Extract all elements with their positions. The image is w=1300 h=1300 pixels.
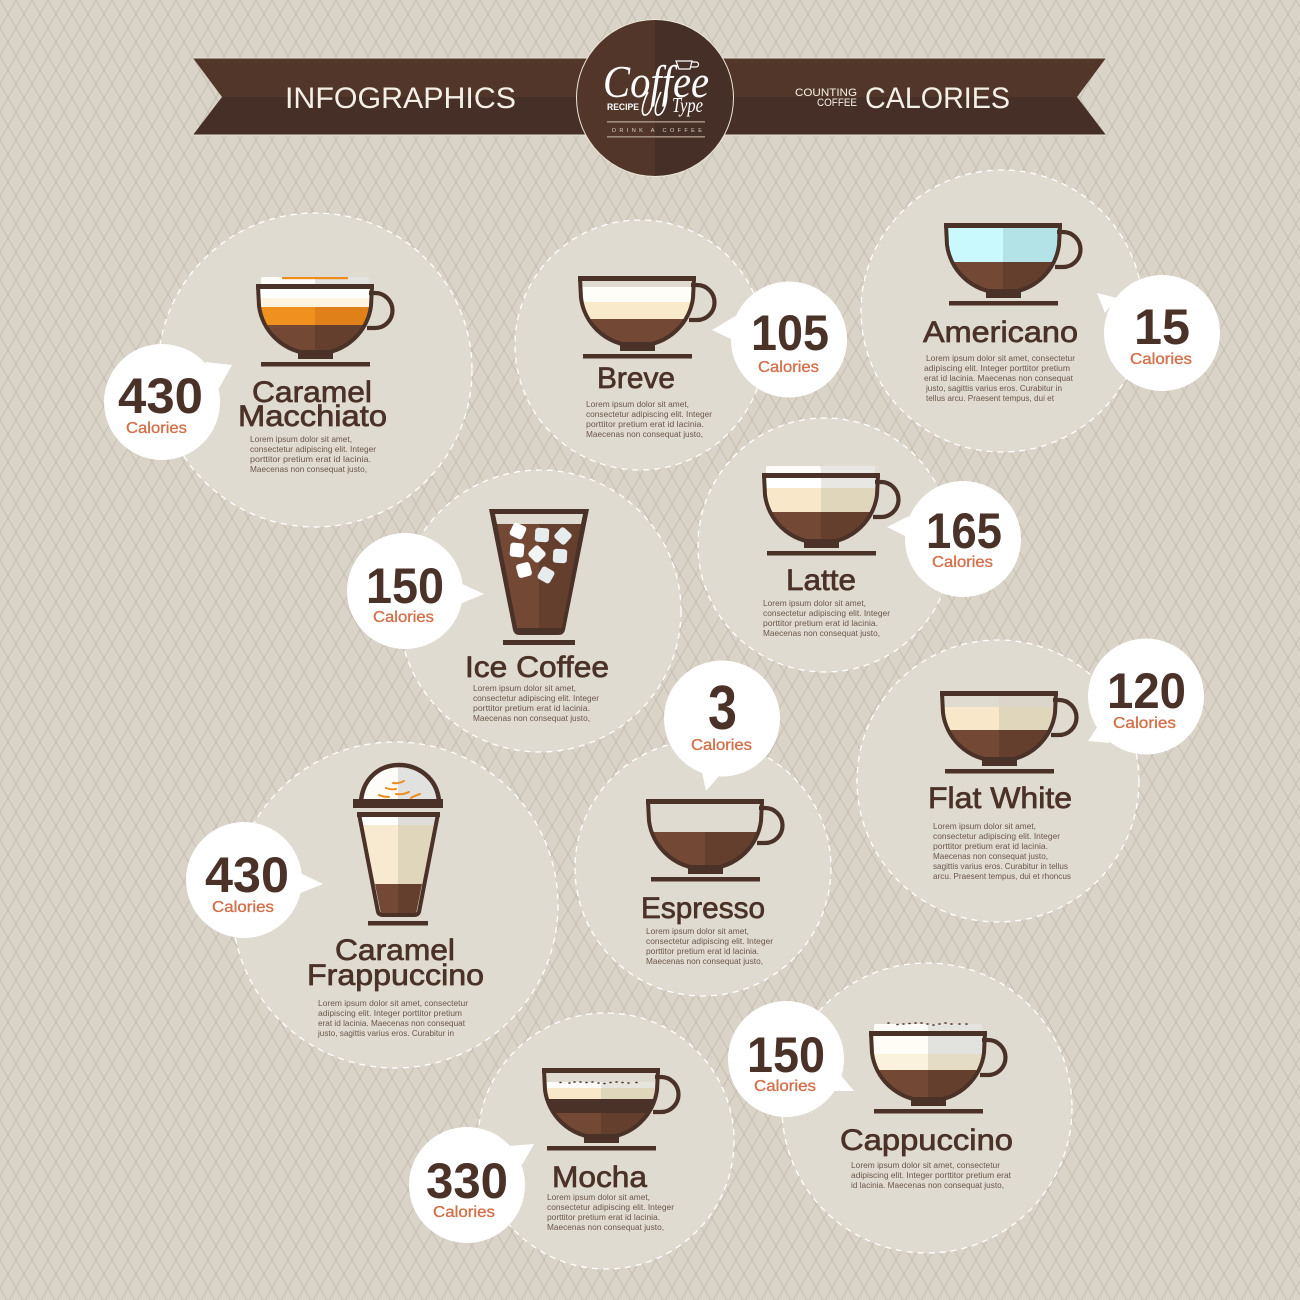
- callout: 330 calories: [409, 1127, 534, 1243]
- description: cappuccino: Lorem ipsum dolor sit amet, consectetur: [851, 1160, 1000, 1170]
- title: cappuccino: Cappuccino: [840, 1124, 1013, 1157]
- foam dots: [560, 1082, 637, 1084]
- title: latte: Latte: [786, 564, 856, 597]
- caramel sprinkles: [379, 781, 420, 798]
- callout: 3 calories: [664, 660, 780, 791]
- title: americano: Americano: [923, 316, 1078, 349]
- description: ice coffee: [473, 683, 599, 723]
- panel: mocha: [409, 1013, 734, 1269]
- panel: breve: [515, 220, 847, 470]
- description: caramel frappuccino: justo, sagittis varius eros. Curabitur in: [317, 1028, 454, 1038]
- description: caramel macchiato: [250, 434, 376, 474]
- description: caramel frappuccino: erat id lacinia. Maecenas non consequat: [318, 1018, 466, 1028]
- description: flat white: arcu. Praesent tempus, dui et rhoncus: [933, 871, 1071, 881]
- description: americano: Lorem ipsum dolor sit amet, consectetur: [926, 353, 1075, 363]
- title: espresso: Espresso: [641, 892, 765, 925]
- description: breve: porttitor pretium erat id lacinia.: [586, 419, 704, 429]
- title: caramel macchiato: Macchiato: [238, 400, 387, 433]
- title: caramel macchiato: [238, 376, 387, 433]
- title: ice coffee: Ice Coffee: [465, 651, 609, 684]
- description: caramel frappuccino: Lorem ipsum dolor sit amet, consectetur: [318, 998, 468, 1008]
- description: caramel macchiato: porttitor pretium erat id lacinia.: [250, 454, 371, 464]
- icon: iced coffee glass: [489, 509, 589, 645]
- title: breve: Breve: [597, 362, 675, 395]
- callout: 330 calories: Calories: [433, 1204, 495, 1221]
- description: flat white: sagittis varius eros. Curabitur in tellus: [933, 861, 1068, 871]
- logo: cup icon: [676, 61, 698, 69]
- description: latte: porttitor pretium erat id lacinia.: [763, 618, 878, 628]
- description: caramel macchiato: Maecenas non consequat justo,: [250, 464, 367, 474]
- callout: 430 calories: 430: [118, 368, 203, 424]
- panel: cappuccino: [728, 963, 1072, 1253]
- icon: breve cup: [578, 276, 714, 358]
- callout: 120 calories: 120: [1107, 663, 1186, 719]
- title: flat white: Flat White: [928, 782, 1072, 815]
- description: latte: consectetur adipiscing elit. Integer: [763, 608, 890, 618]
- description: latte: [763, 598, 890, 638]
- callout: 150 calories: 150: [747, 1027, 825, 1083]
- description: americano: erat id lacinia. Maecenas non consequat: [924, 373, 1074, 383]
- description: ice coffee: Lorem ipsum dolor sit amet,: [473, 683, 576, 693]
- panel: flat white: [857, 638, 1204, 922]
- description: espresso: [646, 926, 773, 966]
- callout: 105 calories: 105: [751, 305, 829, 361]
- description: flat white: consectetur adipiscing elit. Integer: [933, 831, 1060, 841]
- logo badge: [576, 19, 734, 177]
- description: ice coffee: Maecenas non consequat justo,: [473, 713, 590, 723]
- callout: 430 calories: [104, 344, 232, 460]
- foam dots: [888, 1023, 967, 1025]
- description: breve: [586, 399, 712, 439]
- description: breve: Maecenas non consequat justo,: [586, 429, 703, 439]
- description: caramel frappuccino: adipiscing elit. Integer porttitor pretium: [318, 1008, 462, 1018]
- logo: f descenders: [642, 92, 667, 115]
- callout: 15 calories: Calories: [1130, 351, 1192, 368]
- description: mocha: [547, 1192, 674, 1232]
- description: breve: Lorem ipsum dolor sit amet,: [586, 399, 689, 409]
- callout: 430 calories: Calories: [212, 899, 274, 916]
- description: caramel macchiato: consectetur adipiscing elit. Integer: [250, 444, 376, 454]
- description: mocha: Maecenas non consequat justo,: [547, 1222, 664, 1232]
- heading: counting coffee: COFFEE: [817, 97, 857, 109]
- callout: 120 calories: [1088, 638, 1204, 754]
- icon: latte cup: [762, 466, 898, 556]
- description: mocha: porttitor pretium erat id lacinia.: [547, 1212, 660, 1222]
- logo: type: Type: [672, 93, 703, 117]
- callout: 430 calories: [186, 822, 323, 938]
- heading: infographics: INFOGRAPHICS: [285, 82, 516, 115]
- ice cubes: [509, 522, 573, 585]
- callout: 165 calories: Calories: [932, 554, 993, 571]
- callout: 165 calories: [887, 481, 1021, 597]
- description: espresso: porttitor pretium erat id lacinia.: [646, 946, 759, 956]
- heading: calories: CALORIES: [865, 82, 1010, 115]
- panel: latte: [698, 418, 1021, 672]
- logo: tagline: DRINK A COFFEE: [612, 128, 702, 134]
- icon: caramel macchiato cup: [256, 277, 392, 366]
- description: ice coffee: porttitor pretium erat id lacinia.: [473, 703, 590, 713]
- description: mocha: consectetur adipiscing elit. Integer: [547, 1202, 674, 1212]
- description: espresso: Lorem ipsum dolor sit amet,: [646, 926, 749, 936]
- description: cappuccino: adipiscing elit. Integer porttitor pretium erat: [851, 1170, 1012, 1180]
- icon: americano cup: [944, 223, 1080, 306]
- callout: 15 calories: [1097, 275, 1220, 391]
- icon: frappuccino cup: [353, 765, 443, 926]
- description: americano: adipiscing elit. Integer porttitor pretium: [924, 363, 1070, 373]
- description: americano: justo, sagittis varius eros. Curabitur in: [925, 383, 1062, 393]
- description: latte: Maecenas non consequat justo,: [763, 628, 880, 638]
- callout: 105 calories: Calories: [758, 359, 819, 376]
- callout: 105 calories: [712, 282, 847, 398]
- description: ice coffee: consectetur adipiscing elit. Integer: [473, 693, 599, 703]
- title: caramel frappuccino: [307, 934, 484, 992]
- callout: 150 calories: Calories: [754, 1078, 816, 1095]
- icon: flat white cup: [940, 691, 1076, 774]
- ribbon: right: [710, 58, 1106, 135]
- panel: ice coffee: [347, 470, 681, 752]
- description: americano: tellus arcu. Praesent tempus, dui et: [926, 393, 1055, 403]
- description: flat white: [933, 821, 1071, 881]
- logo: recipe: RECIPE: [607, 102, 639, 112]
- panel: caramel frappuccino: [186, 742, 558, 1068]
- callout: 150 calories: [728, 1001, 854, 1117]
- title: caramel macchiato: Caramel: [252, 376, 372, 409]
- callout: 330 calories: 330: [426, 1153, 508, 1209]
- description: breve: consectetur adipiscing elit. Integer: [586, 409, 712, 419]
- icon: cappuccino cup: [869, 1023, 1006, 1114]
- callout: 3 calories: 3: [708, 674, 737, 743]
- icon: mocha cup: [542, 1068, 678, 1150]
- ribbon: left: [193, 58, 600, 135]
- description: espresso: consectetur adipiscing elit. Integer: [646, 936, 773, 946]
- callout: 165 calories: 165: [926, 503, 1002, 559]
- title: mocha: Mocha: [552, 1161, 648, 1194]
- callout: 430 calories: Calories: [126, 420, 187, 437]
- heading: counting coffee: [795, 87, 857, 109]
- logo: tagline: [607, 121, 705, 138]
- icon: espresso cup: [646, 799, 782, 882]
- description: flat white: Lorem ipsum dolor sit amet,: [933, 821, 1036, 831]
- callout: 3 calories: Calories: [691, 737, 752, 754]
- callout: 120 calories: Calories: [1113, 715, 1176, 732]
- description: cappuccino: [851, 1160, 1012, 1190]
- title: caramel frappuccino: Caramel: [335, 934, 455, 967]
- panel: caramel macchiato: [104, 213, 472, 527]
- callout: 150 calories: 150: [366, 558, 444, 614]
- description: espresso: Maecenas non consequat justo,: [646, 956, 763, 966]
- callout: 150 calories: [347, 533, 484, 649]
- description: cappuccino: id lacinia. Maecenas non consequat justo,: [851, 1180, 1004, 1190]
- callout: 15 calories: 15: [1134, 299, 1190, 355]
- description: latte: Lorem ipsum dolor sit amet,: [763, 598, 866, 608]
- title: caramel frappuccino: Frappuccino: [307, 959, 484, 992]
- description: flat white: Maecenas non consequat justo,: [933, 851, 1048, 861]
- logo: coffee wordmark: Coffee: [603, 56, 709, 107]
- heading: counting coffee: COUNTING: [795, 87, 857, 99]
- callout: 430 calories: 430: [205, 847, 289, 903]
- description: caramel frappuccino: [317, 998, 468, 1038]
- panel: americano: [861, 170, 1220, 452]
- panel: espresso: [575, 660, 831, 996]
- description: caramel macchiato: Lorem ipsum dolor sit amet,: [250, 434, 352, 444]
- description: americano: [924, 353, 1075, 403]
- description: mocha: Lorem ipsum dolor sit amet,: [547, 1192, 650, 1202]
- callout: 150 calories: Calories: [373, 609, 434, 626]
- description: flat white: porttitor pretium erat id lacinia.: [933, 841, 1048, 851]
